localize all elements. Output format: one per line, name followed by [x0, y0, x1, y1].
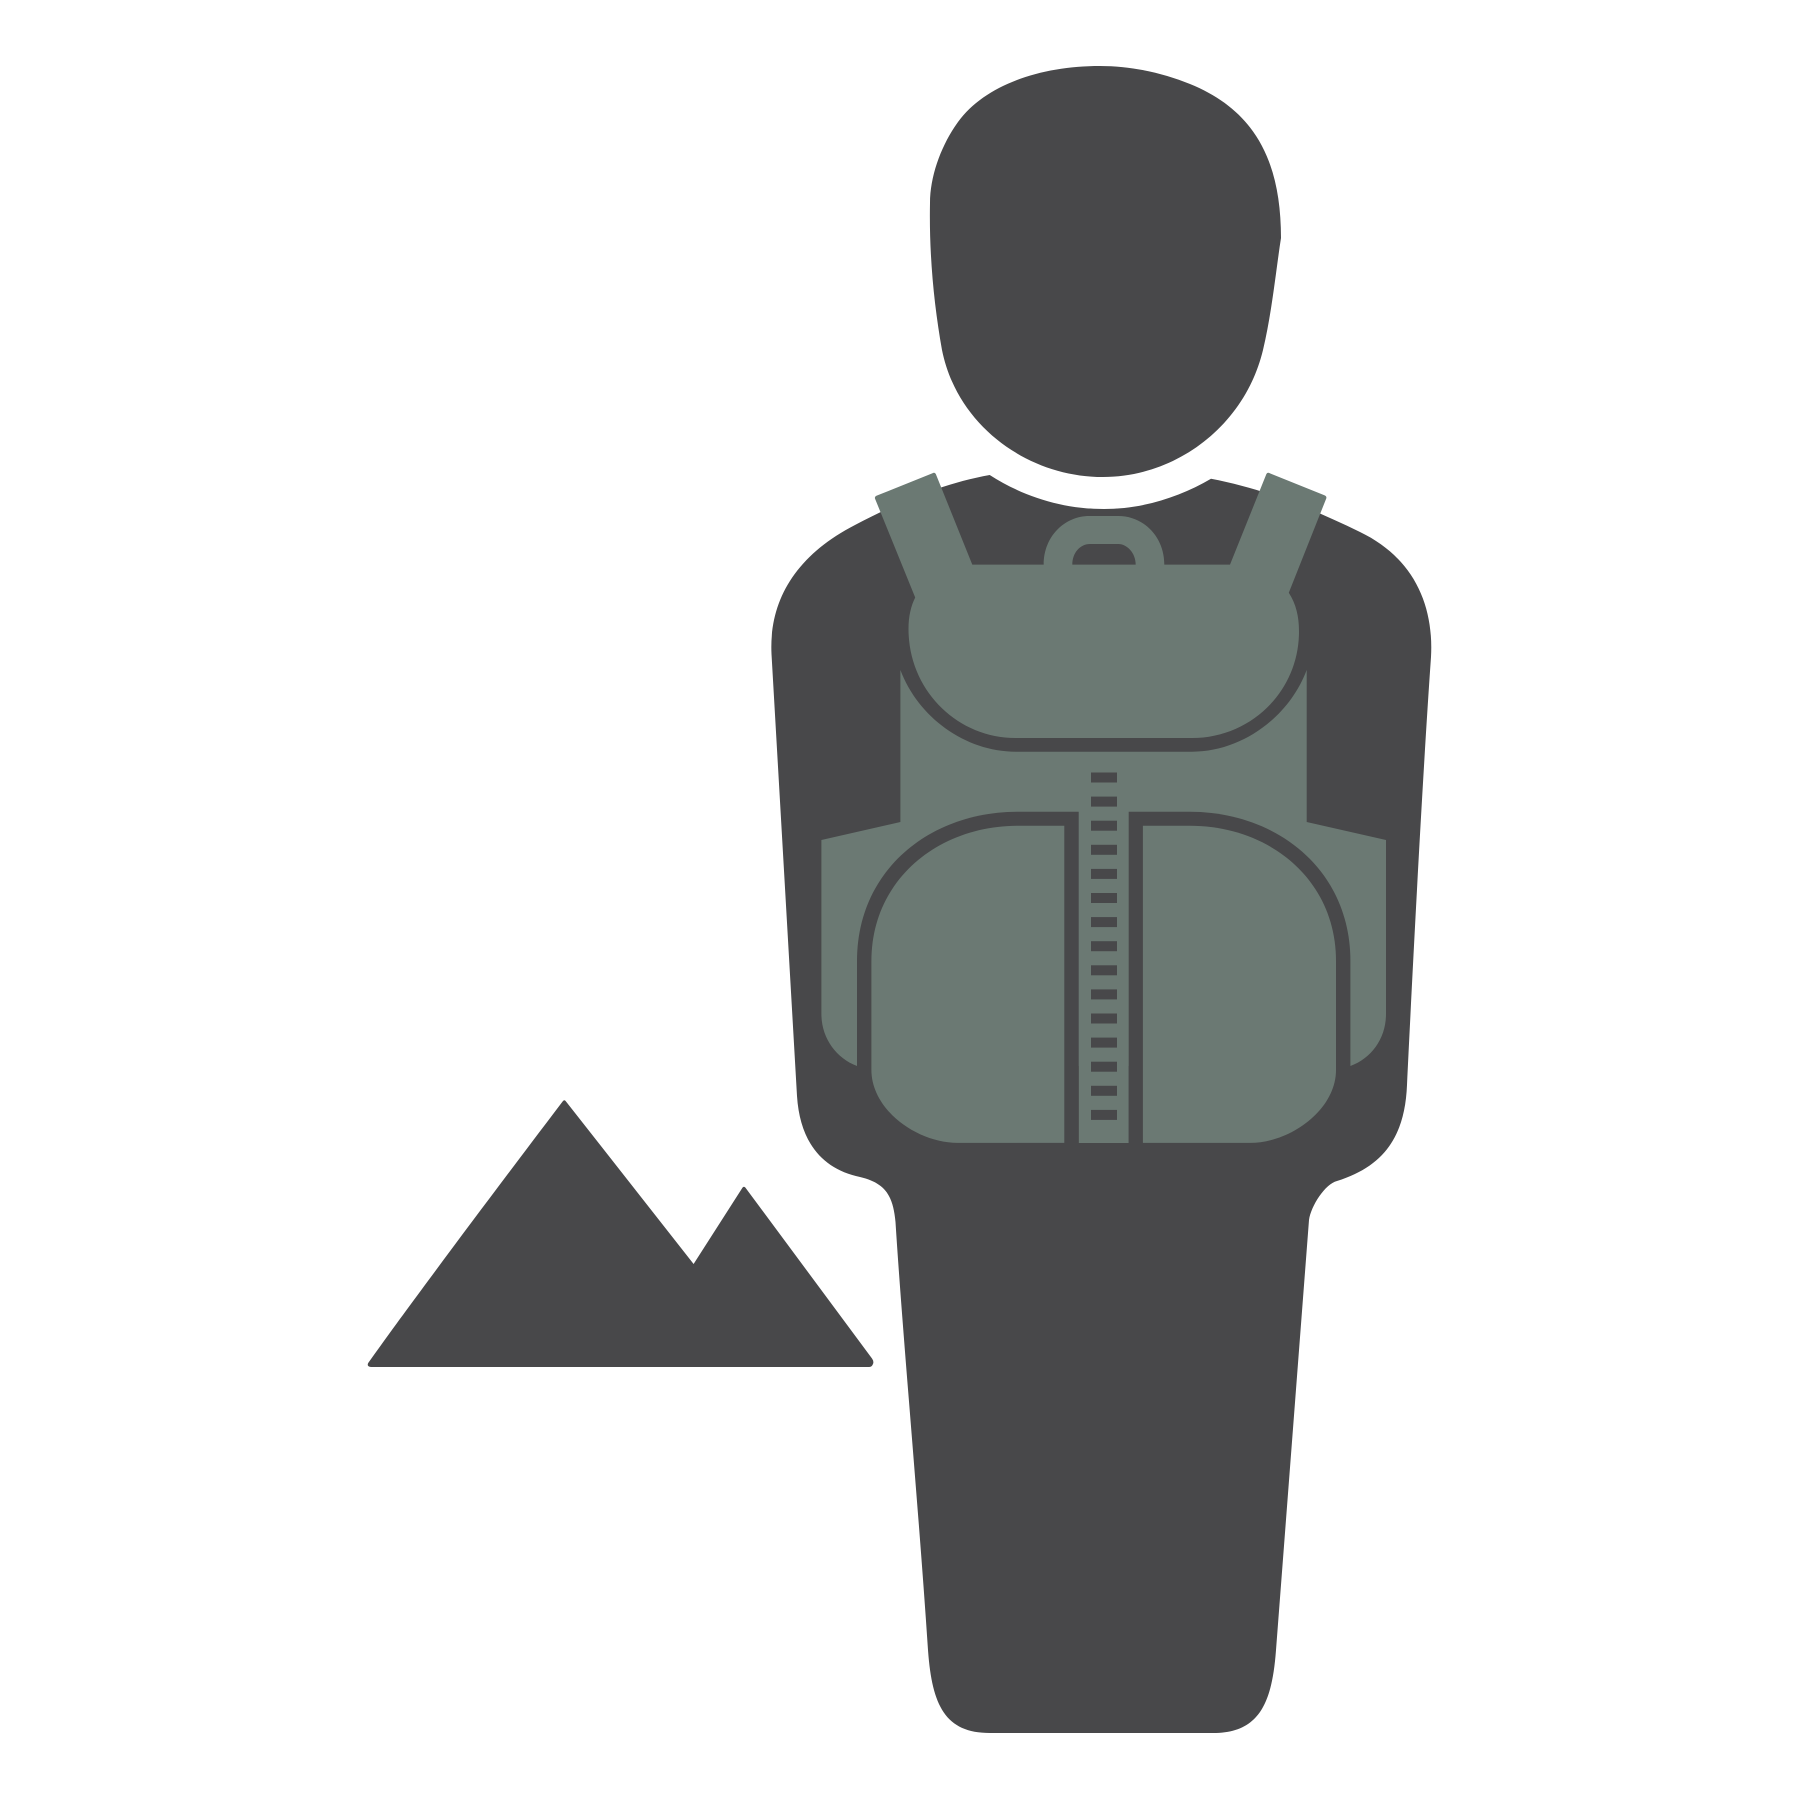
- right pocket outline: [1129, 812, 1350, 1143]
- lid with shoulder straps and top handle: [875, 473, 1326, 738]
- figure: person silhouette with backpack: [771, 66, 1431, 1733]
- right pocket: [1143, 826, 1336, 1143]
- head: [930, 66, 1281, 477]
- left pocket outline: [857, 812, 1079, 1143]
- icon: mountains: [368, 1100, 873, 1367]
- lid outline: [900, 600, 1307, 752]
- left pocket: [871, 826, 1064, 1143]
- backpack main body with side wings: [821, 670, 1386, 1143]
- backpack: [821, 473, 1386, 1143]
- zipper dashes: [1091, 772, 1117, 1120]
- body: [771, 475, 1431, 1733]
